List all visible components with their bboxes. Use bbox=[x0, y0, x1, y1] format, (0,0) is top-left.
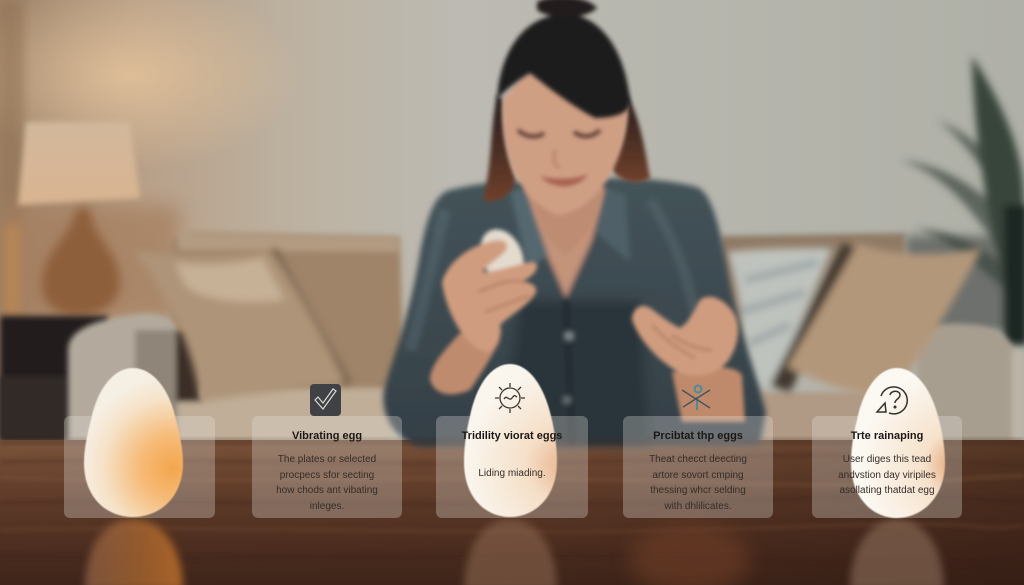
egg 3 bbox=[851, 368, 945, 518]
card: trte rainaping: User diges this tead bbox=[843, 454, 931, 465]
card: vibrating egg: procpecs sfor secting bbox=[280, 470, 374, 480]
card: trte rainaping: andvstion day viripiles bbox=[838, 470, 936, 480]
sofa bbox=[68, 232, 1024, 445]
icon: sun with wave bbox=[495, 383, 525, 413]
table bbox=[0, 440, 1024, 585]
card: precibtat eggs bbox=[623, 416, 773, 518]
card: precibtat eggs: Theat checct deecting bbox=[649, 454, 747, 465]
card: tridility eggs: Liding miading. bbox=[478, 468, 546, 479]
wall bbox=[0, 0, 1024, 450]
card: precibtat eggs: artore sovort cmping bbox=[652, 470, 744, 480]
card: vibrating egg: inleges. bbox=[310, 500, 344, 512]
card: vibrating egg: The plates or selected bbox=[278, 454, 376, 465]
card: vibrating egg: how chods ant vibating bbox=[276, 485, 378, 496]
shirt and torso bbox=[383, 178, 766, 447]
neck bbox=[530, 185, 602, 255]
icon: checkmark badge bbox=[310, 384, 341, 416]
card: blank first card bbox=[64, 416, 215, 518]
hair fringe and facial features bbox=[497, 0, 630, 186]
card: tridility eggs bbox=[436, 416, 588, 518]
icon: question mark in circle bbox=[877, 387, 907, 414]
card: vibrating egg: Vibrating egg bbox=[292, 430, 362, 442]
face bbox=[503, 65, 628, 215]
hair sides bbox=[483, 92, 650, 201]
table edge shadow bbox=[0, 438, 1024, 445]
card: trte rainaping bbox=[812, 416, 962, 518]
card: trte rainaping: asollating thatdat egg bbox=[839, 485, 935, 496]
egg 1 bbox=[84, 368, 183, 517]
egg 2 bbox=[464, 364, 557, 517]
icon: tattoo figure on wrist bbox=[682, 386, 710, 410]
card: vibrating egg bbox=[252, 416, 402, 518]
card: precibtat eggs: with dhlilicates. bbox=[664, 500, 732, 512]
card: trte rainaping: Trte rainaping bbox=[851, 430, 923, 442]
card: tridility eggs: Tridility viorat eggs bbox=[462, 430, 562, 442]
cushions bbox=[135, 243, 982, 402]
plant bbox=[900, 56, 1024, 345]
left arm holding egg bbox=[430, 222, 537, 394]
card: precibtat eggs: thessing whcr selding bbox=[650, 485, 746, 496]
person bbox=[383, 0, 766, 447]
lamp and side table bbox=[0, 122, 180, 440]
right hand open bbox=[632, 297, 745, 422]
card: precibtat eggs: Prcibtat thp eggs bbox=[653, 430, 743, 442]
